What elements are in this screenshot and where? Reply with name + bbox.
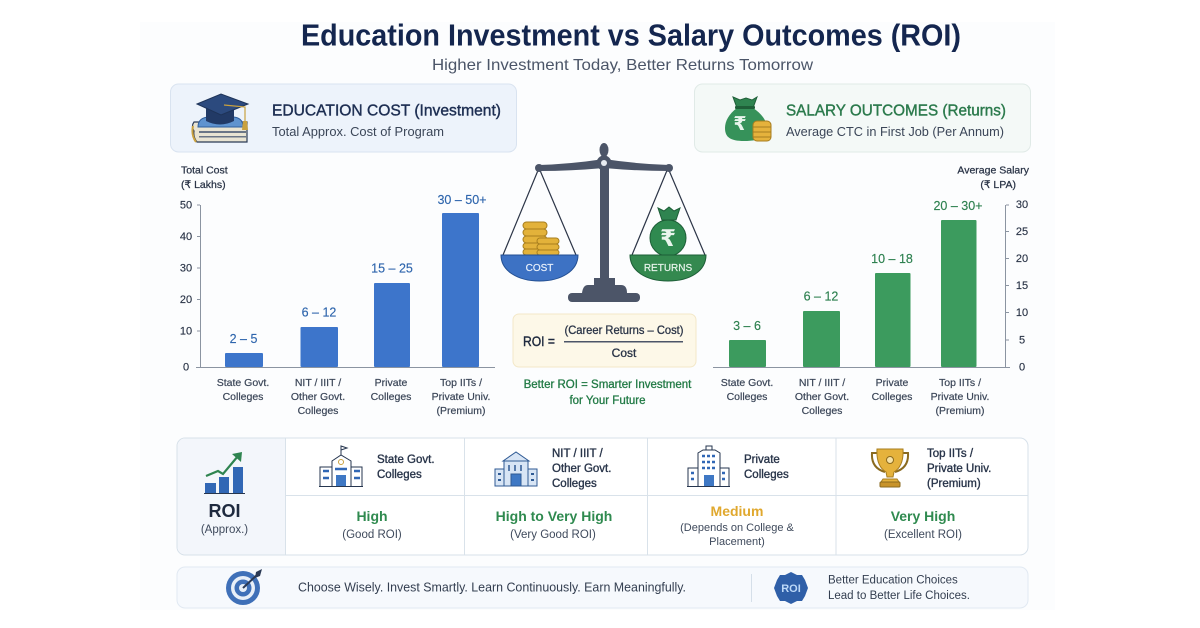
chart: education cost bars: Other Govt.	[291, 391, 345, 403]
chart: education cost bars: 20	[180, 294, 192, 306]
chart: education cost bars: Private Univ.	[432, 391, 490, 403]
money bag on the returns pan	[650, 207, 686, 256]
chart: salary outcomes bars: 6 – 12	[804, 290, 838, 304]
chart: education cost bars: Private	[375, 377, 407, 389]
returns pan	[630, 255, 706, 281]
icon: balance scale: RETURNS	[644, 263, 692, 274]
column: private colleges: Placement)	[709, 536, 765, 548]
chart: education cost bars: 2 – 5	[230, 332, 257, 346]
column: top IITs: (Excellent ROI)	[884, 529, 962, 541]
panel: ROI table	[177, 438, 1028, 555]
icon: private college tower	[687, 446, 730, 486]
column: state govt colleges	[319, 446, 435, 541]
chart: education cost bars: 30	[180, 262, 192, 274]
column: NIT IIIT colleges: (Very Good ROI)	[510, 529, 596, 541]
chart: education cost bars: Colleges	[371, 391, 411, 403]
heading: salary outcomes: SALARY OUTCOMES (Returns)	[786, 102, 1006, 120]
column: top IITs	[872, 448, 991, 541]
heading: education cost: EDUCATION COST (Investment)	[272, 102, 501, 120]
column: NIT IIIT colleges: Other Govt.	[552, 463, 611, 475]
column: top IITs: Private Univ.	[927, 463, 991, 475]
chart: salary outcomes bars: (Premium)	[936, 405, 984, 417]
icon: target with arrow	[226, 569, 262, 605]
column: private colleges: Colleges	[744, 469, 789, 481]
column: private colleges: (Depends on College &	[680, 522, 794, 534]
column: state govt colleges: State Govt.	[377, 454, 435, 466]
chart: salary outcomes bars: 10 – 18	[871, 252, 913, 266]
cell: ROI label: ROI	[208, 501, 241, 521]
chart: salary outcomes bars: Top IITs /	[939, 377, 981, 389]
chart: salary outcomes bars: 0	[1019, 362, 1025, 374]
chart: salary outcomes bars: 10	[1016, 307, 1028, 319]
chart: salary outcomes bars: State Govt.	[721, 377, 773, 389]
callout: ROI formula	[513, 314, 696, 367]
text: better ROI message: Better ROI = Smarter Investment	[524, 379, 691, 391]
cell: ROI label: (Approx.)	[201, 524, 248, 536]
column: NIT IIIT colleges: Colleges	[552, 478, 597, 490]
text: footer slogan: Choose Wisely. Invest Smartly. Learn Continuously. Earn Meaningfully.	[298, 580, 686, 594]
icon: trophy	[872, 449, 908, 487]
icon: money bag with coins: ₹	[733, 114, 747, 135]
chart: salary outcomes bars: NIT / IIIT /	[799, 377, 845, 389]
chart: education cost bars: 40	[180, 231, 192, 243]
icon: NIT institute building	[495, 452, 537, 486]
chart: education cost bars: NIT / IIIT /	[295, 377, 341, 389]
money bag on the returns pan: ₹	[660, 225, 676, 251]
column: state govt colleges: Colleges	[377, 469, 422, 481]
column: NIT IIIT colleges: High to Very High	[496, 508, 612, 524]
coins on the cost pan	[523, 222, 559, 255]
text: footer tagline: Better Education Choices	[828, 574, 958, 586]
axis title: average salary: Average Salary	[957, 164, 1029, 176]
chart: salary outcomes bars: 3 – 6	[733, 319, 761, 333]
column: NIT IIIT colleges	[495, 448, 612, 541]
chart: salary outcomes bars: 30	[1016, 199, 1028, 211]
axis title: total cost: (₹ Lakhs)	[181, 179, 226, 191]
chart: salary outcomes bars: Private Univ.	[931, 391, 989, 403]
icon: state college building	[319, 446, 363, 486]
chart: education cost bars	[180, 164, 495, 417]
chart: salary outcomes bars: Colleges	[802, 405, 842, 417]
column: top IITs: Very High	[891, 508, 955, 524]
axis title: total cost: Total Cost	[181, 164, 228, 176]
column: private colleges: Private	[744, 454, 780, 466]
chart: salary outcomes bars: 20 – 30+	[933, 199, 983, 213]
chart: salary outcomes bars: Colleges	[727, 391, 767, 403]
panel: salary outcomes header	[694, 84, 1030, 152]
text: better ROI message: for Your Future	[569, 395, 646, 407]
callout: ROI formula: (Career Returns – Cost)	[564, 323, 684, 337]
chart: education cost bars: (Premium)	[436, 405, 486, 417]
icon: ROI badge	[774, 572, 808, 604]
chart: salary outcomes bars: Other Govt.	[795, 391, 849, 403]
title: Education Investment vs Salary Outcomes (ROI)	[301, 18, 961, 52]
callout: ROI formula: Cost	[612, 346, 637, 360]
icon: balance scale: COST	[526, 263, 553, 274]
text: salary outcomes subtitle: Average CTC in First Job (Per Annum)	[786, 125, 1004, 139]
axis title: average salary: (₹ LPA)	[980, 179, 1016, 191]
chart: education cost bars: 50	[180, 200, 192, 212]
beam and stand	[535, 143, 673, 302]
chart: education cost bars: State Govt.	[217, 377, 269, 389]
chart: education cost bars: 6 – 12	[302, 306, 336, 320]
subtitle: Higher Investment Today, Better Returns Tomorrow	[432, 57, 813, 74]
icon: ROI badge: ROI	[781, 583, 801, 595]
text: footer tagline: Lead to Better Life Choices.	[828, 590, 970, 602]
chart: salary outcomes bars: Private	[876, 377, 908, 389]
chart: salary outcomes bars: 15	[1016, 280, 1028, 292]
chart: salary outcomes bars: Colleges	[872, 391, 912, 403]
chart: salary outcomes bars: 20	[1016, 253, 1028, 265]
chart: salary outcomes bars: 25	[1016, 226, 1028, 238]
chart: salary outcomes bars	[713, 164, 1030, 417]
column: private colleges	[680, 446, 795, 548]
cell: ROI label	[201, 452, 248, 536]
chart: education cost bars: 30 – 50+	[437, 193, 487, 207]
chart: education cost bars: Top IITs /	[440, 377, 482, 389]
chart: education cost bars: Colleges	[298, 405, 338, 417]
icon: balance scale	[501, 143, 706, 302]
text: education cost subtitle: Total Approx. Cost of Program	[272, 125, 444, 139]
chart: education cost bars: 10	[180, 326, 192, 338]
column: NIT IIIT colleges: NIT / IIIT /	[552, 448, 603, 460]
column: private colleges: Medium	[711, 503, 763, 519]
chart: education cost bars: 0	[183, 362, 189, 374]
cost pan	[501, 255, 578, 281]
callout: ROI formula: ROI =	[523, 333, 555, 349]
panel: footer message	[177, 567, 1028, 608]
column: state govt colleges: (Good ROI)	[342, 529, 402, 541]
icon: graduation cap on books	[192, 94, 248, 142]
chart: education cost bars: 15 – 25	[371, 262, 413, 276]
icon: money bag with coins	[725, 97, 771, 141]
column: top IITs: (Premium)	[927, 478, 981, 490]
column: state govt colleges: High	[356, 508, 388, 524]
chart: education cost bars: Colleges	[223, 391, 263, 403]
icon: rising bar chart	[204, 452, 245, 494]
column: top IITs: Top IITs /	[927, 448, 973, 460]
panel: education cost header	[170, 84, 516, 152]
chart: salary outcomes bars: 5	[1019, 334, 1025, 346]
